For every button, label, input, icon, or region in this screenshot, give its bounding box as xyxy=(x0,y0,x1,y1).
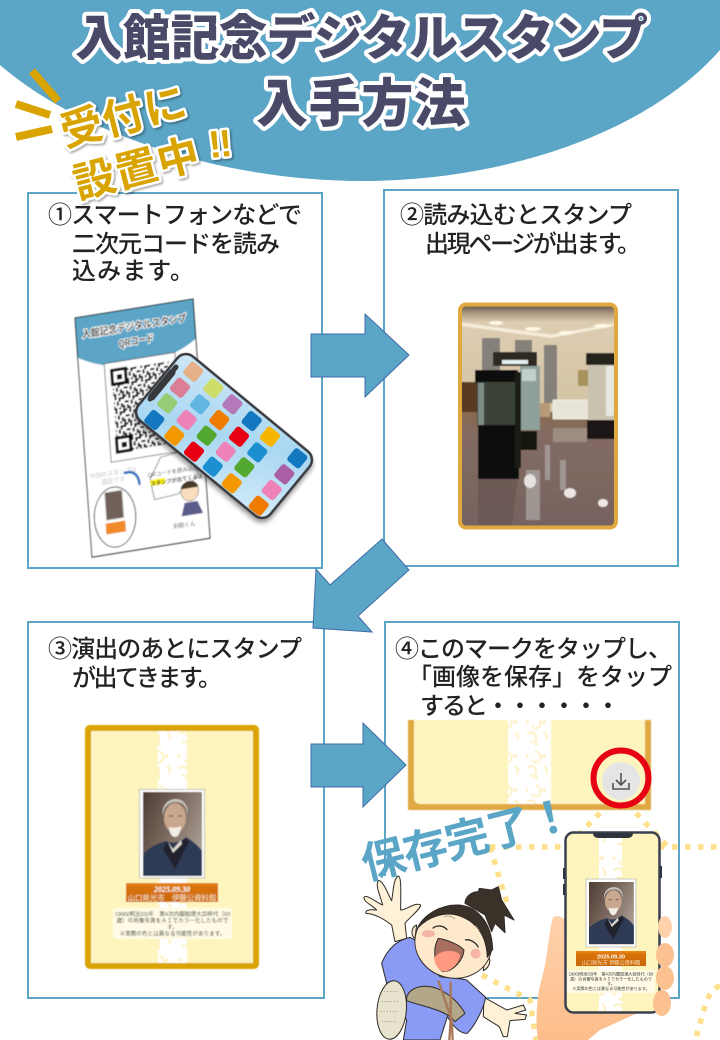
border gap behind boy xyxy=(383,876,388,1000)
callout: installed at reception: 受付に xyxy=(55,78,192,156)
caption xyxy=(113,908,232,939)
hand holding phone xyxy=(537,832,674,1040)
raised arm and hand xyxy=(364,876,421,942)
blush xyxy=(471,949,481,959)
header arc xyxy=(0,0,720,181)
phone banner: 山口県光市 伊藤公資料館 xyxy=(582,958,640,966)
step 1 text: ①スマートフォンなどで xyxy=(48,202,302,229)
sandal xyxy=(374,979,409,1040)
mouth xyxy=(435,938,464,972)
panel: step 3 xyxy=(28,622,324,998)
smartphone with app icons xyxy=(132,350,316,522)
eyes xyxy=(433,926,478,947)
phone caption: 歳）の肖像写真をＡＩでカラー化したもので xyxy=(570,976,652,982)
QR poster: 今回のスタンプは xyxy=(89,465,137,481)
phone portrait xyxy=(586,879,636,947)
callout: installed at reception: !! xyxy=(207,123,232,167)
phone banner xyxy=(576,951,646,966)
saved phone xyxy=(563,832,662,1012)
museum photo xyxy=(460,304,616,528)
phone caption: 1900(明治33)年 第4次内閣総理大臣時代（60 xyxy=(569,970,654,976)
arrow: step 2 to 3 xyxy=(313,539,409,632)
strap xyxy=(438,981,453,1040)
belt xyxy=(407,986,465,1022)
panel: step 4 xyxy=(385,622,679,998)
date banner: 2025.09.30 xyxy=(153,885,190,894)
hair xyxy=(417,905,493,957)
starburst rays xyxy=(16,71,58,137)
ears xyxy=(412,925,490,971)
caption: ※実際の色とは異なる可能性があります。 xyxy=(120,930,225,938)
step 2 text: ②読み込むとスタンプ xyxy=(400,202,632,229)
step 3 text: ③演出のあとにスタンプ xyxy=(48,636,302,663)
panel: step 1 xyxy=(28,193,322,568)
callout: installed at reception: 設置中 xyxy=(68,130,205,208)
hand xyxy=(537,916,640,1040)
QR poster: QRコードを読み込むと xyxy=(148,463,204,480)
caption: 1900(明治33)年 第4次内閣総理大臣時代（60 xyxy=(115,910,230,918)
QR poster: スタンプが出てくるよ！ xyxy=(150,470,209,488)
download mark with red circle xyxy=(594,750,648,806)
blush xyxy=(422,930,435,937)
date banner xyxy=(126,883,218,902)
face xyxy=(407,900,500,987)
caption: 歳）の肖像写真をＡＩでカラー化したもので xyxy=(117,916,229,924)
stamp card xyxy=(88,728,256,966)
title xyxy=(75,11,648,134)
step 4 text: 「画像を保存」をタップ xyxy=(408,664,672,691)
phone caption: す。 xyxy=(607,981,615,986)
boy character xyxy=(364,876,527,1040)
step 2 text: 出現ページが出ます。 xyxy=(425,231,641,258)
caption: す。 xyxy=(167,924,178,931)
stamp card crop xyxy=(408,720,651,810)
QR poster: 利助くん xyxy=(173,519,196,531)
title: 入館記念デジタルスタンプ xyxy=(75,11,648,66)
portrait xyxy=(140,790,204,878)
date banner: 山口県光市 伊藤公資料館 xyxy=(128,894,217,902)
panel: step 2 xyxy=(384,190,678,566)
fingers xyxy=(653,916,674,1016)
topknot xyxy=(465,887,514,933)
step 4 text: すると・・・・・・ xyxy=(420,693,620,720)
callout: installed at reception xyxy=(55,78,232,208)
dotted decoration lines xyxy=(482,813,720,1040)
kimono xyxy=(382,937,486,1040)
step 1 text: 込みます。 xyxy=(72,258,194,285)
arrow: step 1 to 2 xyxy=(311,314,409,397)
QR poster: QRコード xyxy=(118,334,154,350)
phone caption xyxy=(567,970,655,993)
arrow: step 3 to 4 xyxy=(311,723,406,807)
phone banner: 2025.09.30 xyxy=(597,954,625,960)
saved heading: 保存完了！ xyxy=(357,790,577,890)
step 4 text: ④このマークをタップし、 xyxy=(395,636,672,663)
QR poster: 入館記念デジタルスタンプ xyxy=(82,312,187,341)
brows xyxy=(444,916,479,932)
low hand xyxy=(483,997,527,1037)
QR poster xyxy=(74,298,212,558)
step 1 text: 二次元コードを読み xyxy=(72,231,280,258)
step 3 text: が出てきます。 xyxy=(72,665,222,692)
phone caption: ※実際の色とは異なる可能性があります。 xyxy=(572,985,650,991)
QR poster: 設定です xyxy=(101,475,126,487)
title: 入手方法 xyxy=(256,76,466,134)
tongue xyxy=(434,951,460,972)
